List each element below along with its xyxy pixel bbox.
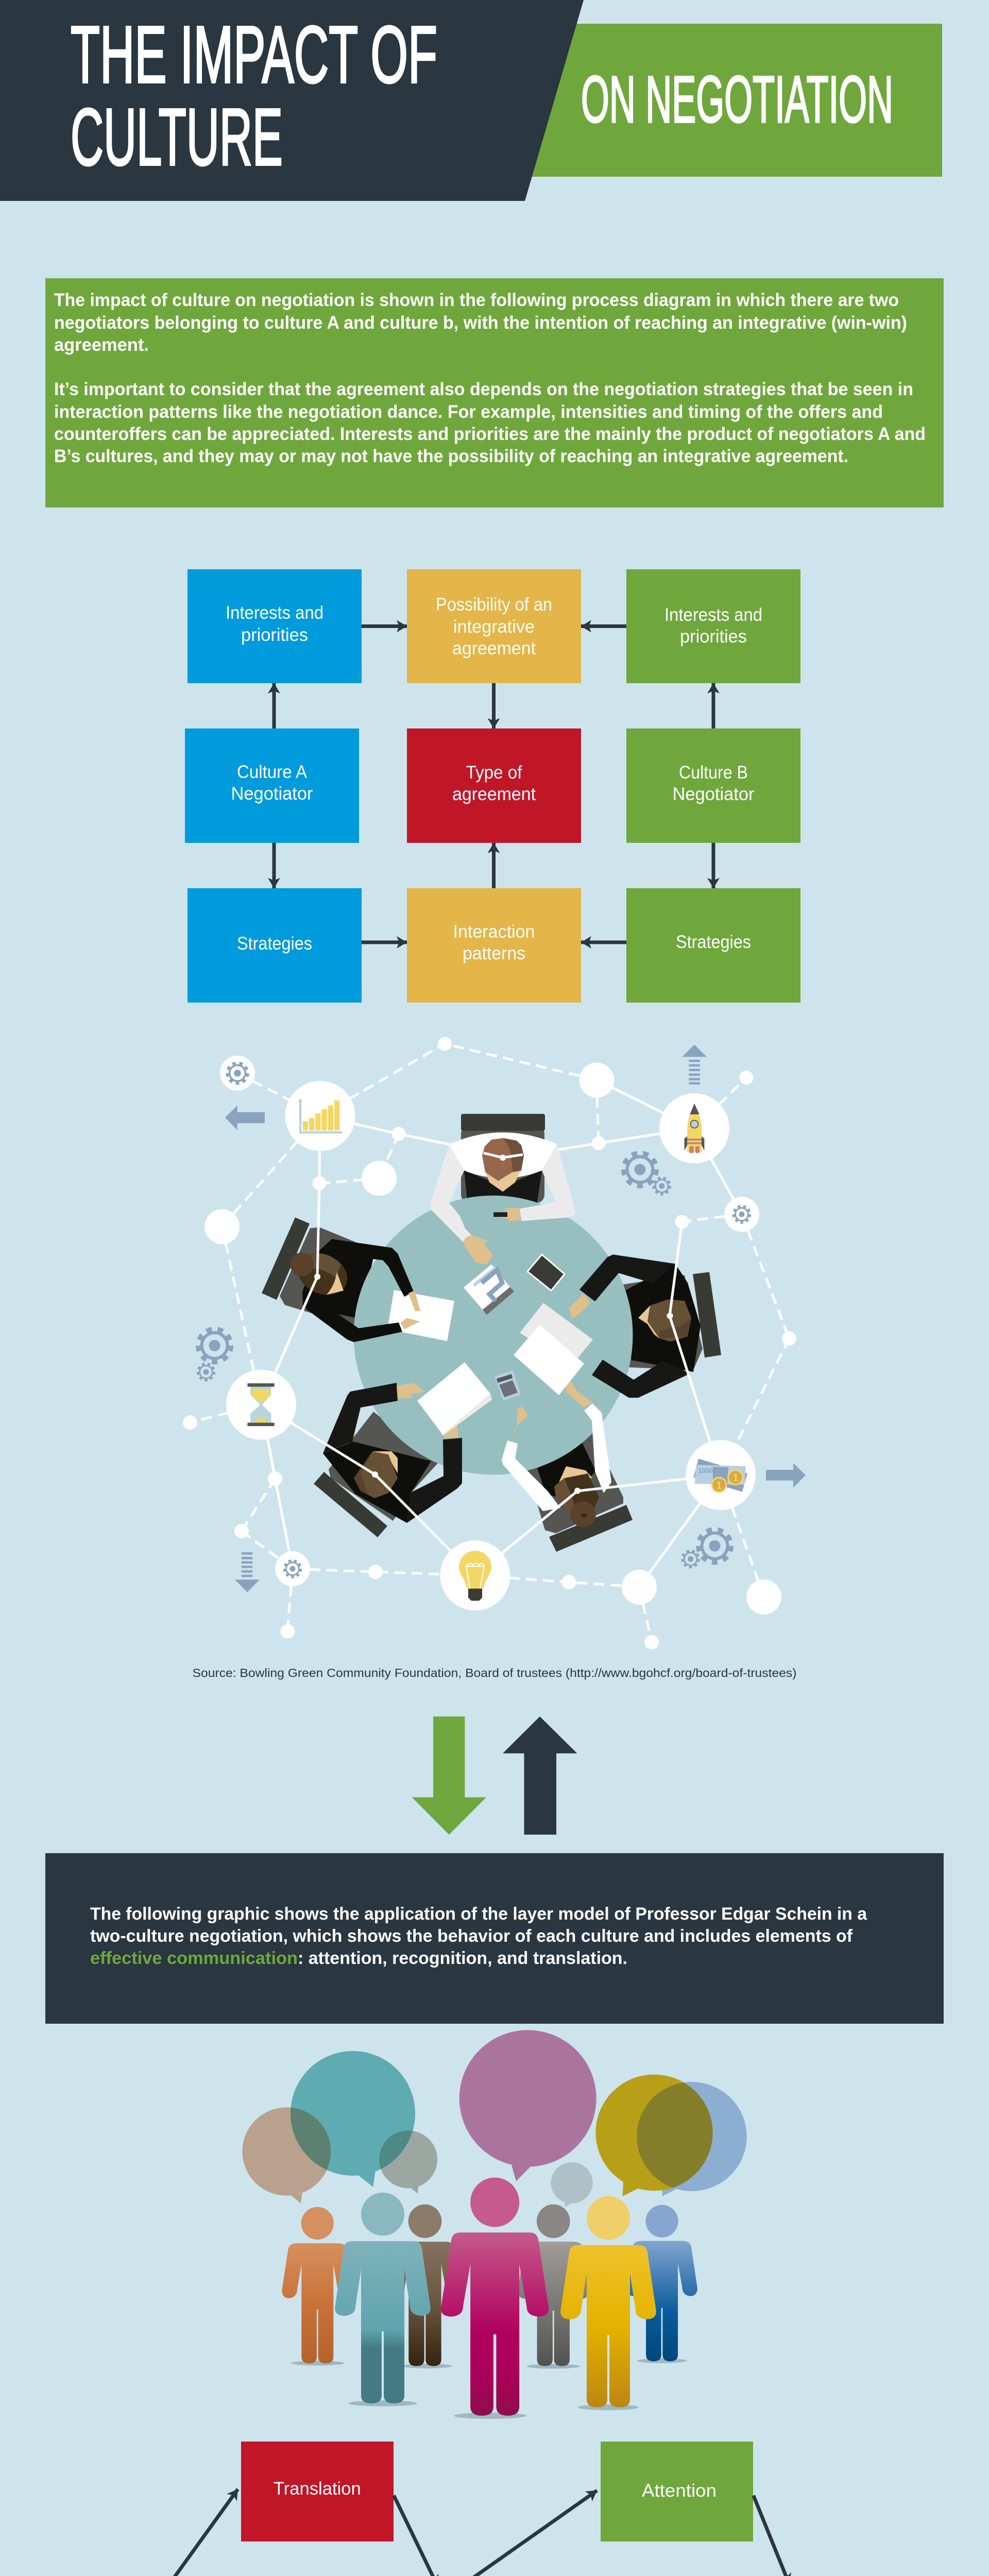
icon: money (693, 1459, 747, 1492)
process diagram (185, 569, 800, 1003)
intro text panel: It’s important to consider that the agreement also depends on the negotiation strategies that be seen in (54, 379, 913, 399)
icon: striped arrow down (235, 1552, 260, 1592)
figure: brown (389, 2205, 461, 2366)
person: right man chair (623, 1272, 721, 1370)
icon: arrow left (225, 1106, 265, 1130)
text panel: Schein layer model (45, 1853, 944, 2024)
people with speech bubbles (242, 2030, 747, 2419)
box: culture B negotiator: Culture B (679, 762, 748, 783)
network lines (190, 1044, 789, 1642)
icon: arrow right (766, 1463, 806, 1487)
box: possibility of integrative agreement: integrative (453, 617, 535, 637)
person: top man chair (461, 1114, 545, 1203)
text panel: Schein layer model: effective communication (90, 1948, 298, 1968)
box: translation top (241, 2442, 394, 2541)
icon: calculator (494, 1370, 521, 1401)
arrow: dark up (503, 1717, 577, 1835)
figure: orange (282, 2207, 353, 2363)
box: culture B negotiator (626, 728, 800, 843)
icon: money: 1 (732, 1472, 739, 1484)
box: type of agreement (407, 728, 581, 843)
box: strategies A (187, 888, 362, 1003)
box: culture A negotiator: Culture A (237, 762, 308, 782)
subtitle panel (531, 24, 942, 177)
box: translation top: Translation (274, 2479, 361, 2499)
intro text panel: agreement. (54, 334, 149, 355)
box: interaction patterns (407, 888, 581, 1003)
arrows: process diagram (274, 626, 713, 942)
text panel: Schein layer model: : attention, recognition, and translation. (298, 1948, 627, 1968)
table (353, 1195, 633, 1475)
box: possibility of integrative agreement (407, 569, 581, 683)
crowd figures (282, 2178, 697, 2419)
figure: yellow (560, 2196, 656, 2408)
box: culture A negotiator (185, 728, 359, 843)
intro text panel (45, 278, 944, 507)
arrows: cycle diagram (165, 2489, 798, 2576)
person: lower right woman chair (527, 1433, 633, 1552)
icon: book with chart (464, 1264, 514, 1315)
icon: gears (198, 1063, 750, 1577)
box: interaction patterns: Interaction (453, 922, 535, 942)
box: possibility of integrative agreement: agreement (452, 638, 536, 658)
lower right woman (475, 1379, 721, 1575)
box: interests and priorities A (187, 569, 362, 683)
figure: blue (626, 2205, 697, 2361)
right man (569, 1222, 721, 1475)
icon: money: 1 (716, 1480, 722, 1492)
intro text panel: counteroffers can be appreciated. Interests and priorities are the mainly the product of negotiators A and (54, 423, 926, 444)
icon: hourglass (247, 1383, 275, 1426)
box: type of agreement: agreement (452, 784, 536, 804)
table items (417, 1255, 593, 1436)
person: lower left man chair (314, 1412, 438, 1537)
source note 1: Source: Bowling Green Community Foundation, Board of trustees (http://www.bgohcf.org/board-of-trustees) (193, 1666, 796, 1680)
torsos under table (302, 1171, 701, 1523)
arrow: green down (412, 1717, 486, 1835)
icon: tablet (527, 1255, 565, 1291)
title panel (0, 0, 584, 201)
icon: light bulb (459, 1551, 491, 1601)
box: strategies A: Strategies (237, 934, 312, 954)
box: strategies B (626, 888, 800, 1003)
box: attention top: Attention (642, 2481, 717, 2501)
shadows (291, 2359, 687, 2419)
box: possibility of integrative agreement: Possibility of an (436, 595, 552, 615)
icon: striped arrow up (682, 1045, 707, 1084)
figure: magenta (441, 2178, 549, 2416)
text panel: Schein layer model: The following graphic shows the application of the layer model of Professor Edgar Schein in a (90, 1904, 867, 1924)
speech bubbles (242, 2030, 747, 2207)
intro text panel: negotiators belonging to culture A and culture b, with the intention of reaching an integrative (win-win) (54, 312, 907, 333)
box: interaction patterns: patterns (463, 943, 525, 963)
box: interests and priorities B: Interests and (664, 605, 762, 625)
box: interests and priorities B (626, 569, 800, 683)
illustration: negotiators around table with network (183, 1037, 806, 1650)
lower left man (261, 1383, 475, 1575)
intro text panel: The impact of culture on negotiation is shown in the following process diagram in which there are two (54, 290, 899, 310)
box: interests and priorities A: Interests and (226, 603, 323, 623)
title panel: THE IMPACT OF (71, 10, 437, 100)
box: type of agreement: Type of (466, 762, 522, 783)
icon: bar chart (298, 1098, 342, 1132)
left woman (290, 1239, 454, 1342)
papers (417, 1303, 593, 1436)
icon: rocket (685, 1104, 704, 1153)
left woman network link (261, 1116, 320, 1404)
box: interests and priorities B: priorities (680, 626, 747, 647)
icon: money: 1000 (698, 1467, 713, 1475)
figure: teal (335, 2193, 431, 2403)
text panel: Schein layer model: two-culture negotiation, which shows the behavior of each culture and includes elements of (90, 1926, 853, 1946)
box: interests and priorities A: priorities (241, 625, 308, 645)
box: culture B negotiator: Negotiator (673, 784, 755, 804)
box: culture A negotiator: Negotiator (231, 784, 313, 804)
box: strategies B: Strategies (676, 932, 751, 952)
box: attention top (601, 2442, 753, 2541)
header banner (0, 0, 942, 201)
intro text panel: interaction patterns like the negotiation dance. For example, intensities and timing of the offers and (54, 401, 883, 422)
title panel: CULTURE (71, 92, 283, 182)
person: left woman chair (262, 1217, 374, 1326)
intro text panel: B’s cultures, and they may or may not have the possibility of reaching an integrative agreement. (54, 446, 848, 466)
communication cycle diagram (152, 2442, 842, 2576)
top man (430, 1132, 575, 1264)
figure: gray (518, 2205, 589, 2366)
network nodes (183, 1037, 796, 1650)
